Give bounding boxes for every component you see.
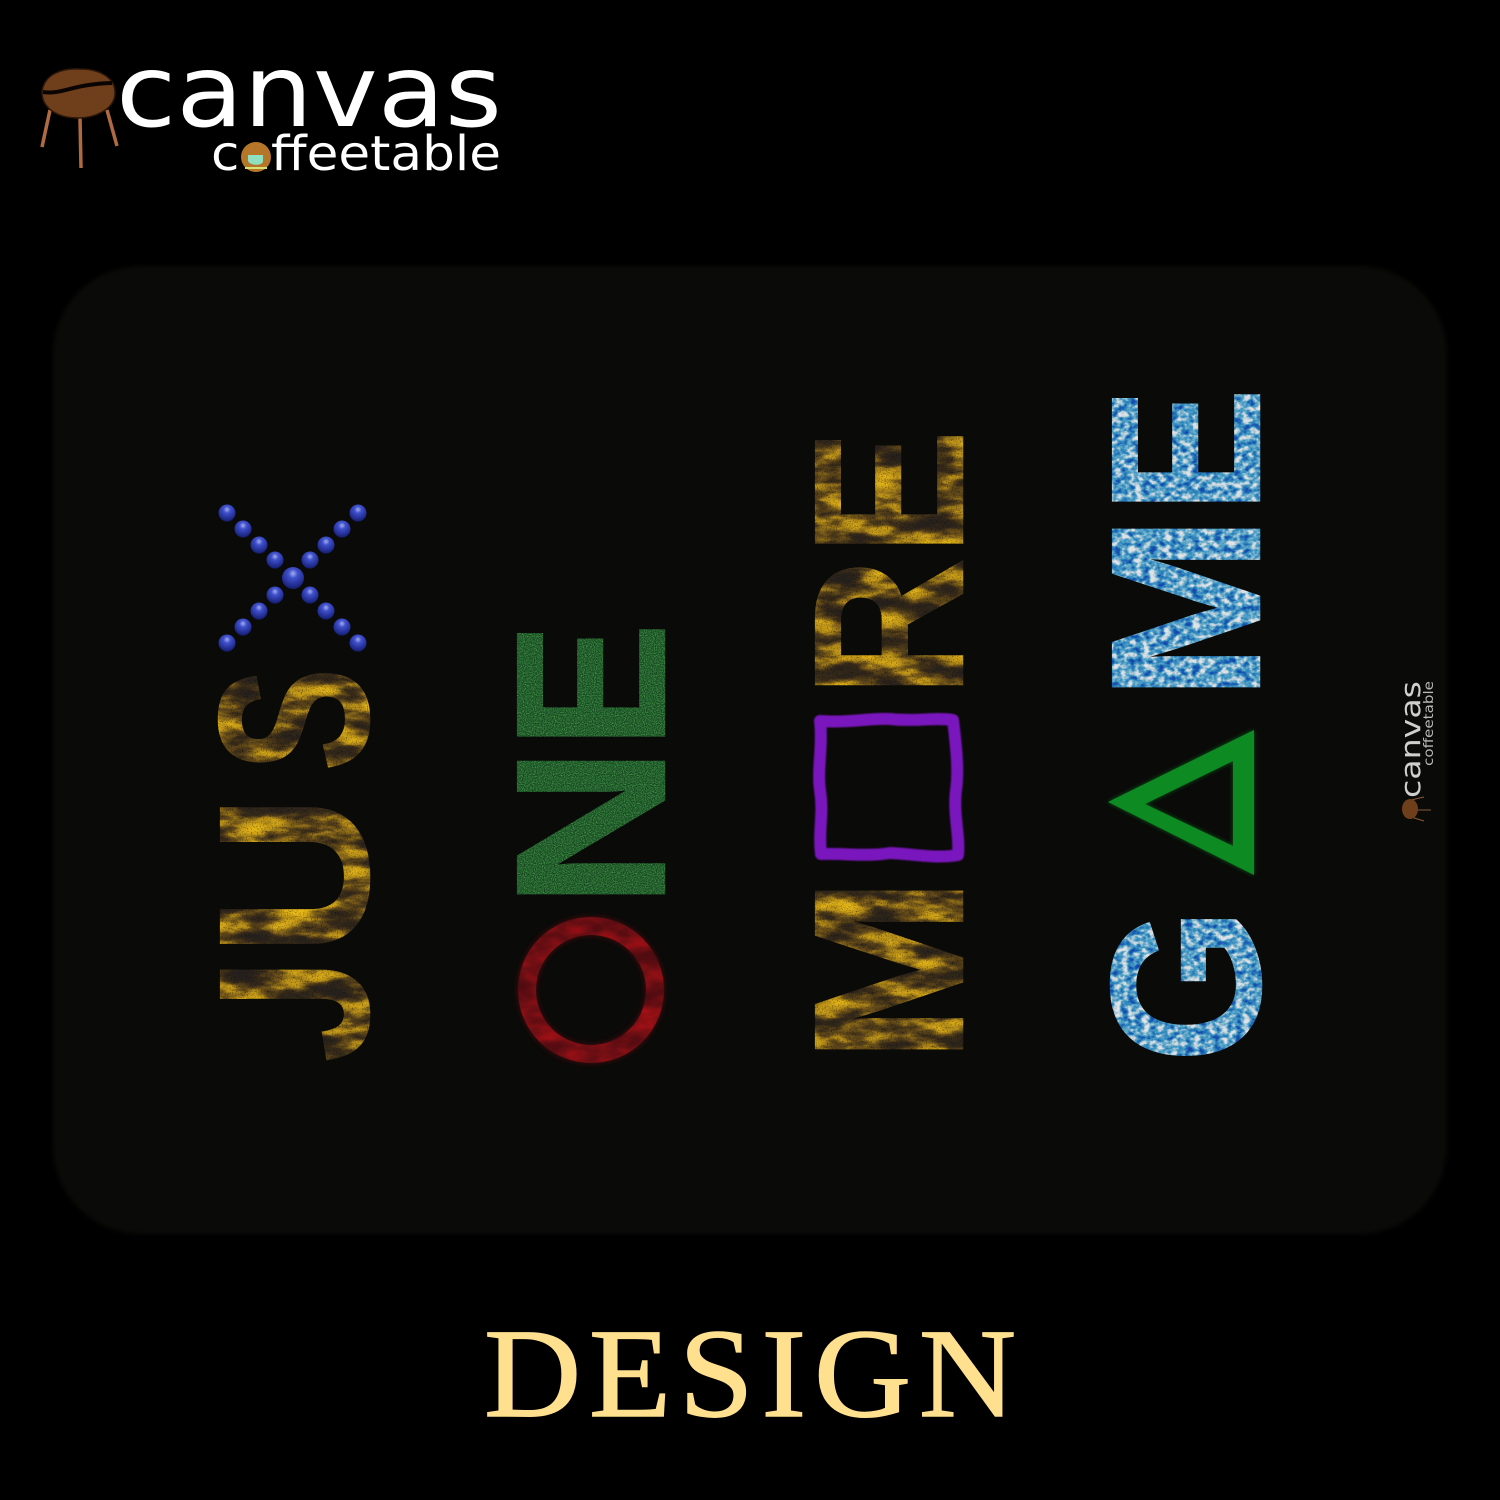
letters: M R E xyxy=(770,430,1007,1063)
icon: coffee bean table xyxy=(42,69,117,168)
mask: J top bar removal xyxy=(212,999,250,1032)
letters: G M E: G xyxy=(1067,908,1304,1063)
icon: X of beads xyxy=(218,504,366,652)
wordmark: canvas: canvas xyxy=(116,33,502,150)
icon: coffee cup xyxy=(241,142,271,172)
word: ONE xyxy=(472,623,709,1054)
icon: red circle xyxy=(527,926,655,1054)
letters: N E xyxy=(472,623,709,908)
letters: N E: N xyxy=(472,747,709,908)
word: JUST xyxy=(175,504,412,1062)
icon: purple square xyxy=(819,719,958,857)
word: MORE xyxy=(770,430,1007,1063)
word: GAME xyxy=(1067,388,1304,1063)
small wordmark: coffeetable: coffeetable xyxy=(1422,681,1437,766)
letters: M R E: M xyxy=(770,877,1007,1063)
heading: DESIGN: DESIGN xyxy=(484,1303,1016,1444)
letters: G M E: M xyxy=(1067,515,1304,701)
panel: mat xyxy=(53,266,1447,1234)
letters: G M E: E xyxy=(1067,388,1304,513)
letters: J U S: S xyxy=(175,668,412,771)
wordmark: coffeetable: coffeetable xyxy=(211,126,501,182)
small icon: table xyxy=(1402,797,1431,821)
letters: M R E: E xyxy=(770,430,1007,555)
letters: J U S: U xyxy=(175,795,412,956)
letters: G M E xyxy=(1067,388,1304,1063)
logo: canvas coffeetable xyxy=(42,33,502,182)
small wordmark: canvas: canvas xyxy=(1394,681,1427,798)
icon: green triangle xyxy=(1108,730,1254,875)
letters: M R E: R xyxy=(770,558,1007,697)
small logo on mat xyxy=(1394,681,1437,821)
letters: J U S xyxy=(175,668,412,1062)
letters: J U S: J xyxy=(175,958,412,1062)
letters: N E: E xyxy=(472,623,709,748)
